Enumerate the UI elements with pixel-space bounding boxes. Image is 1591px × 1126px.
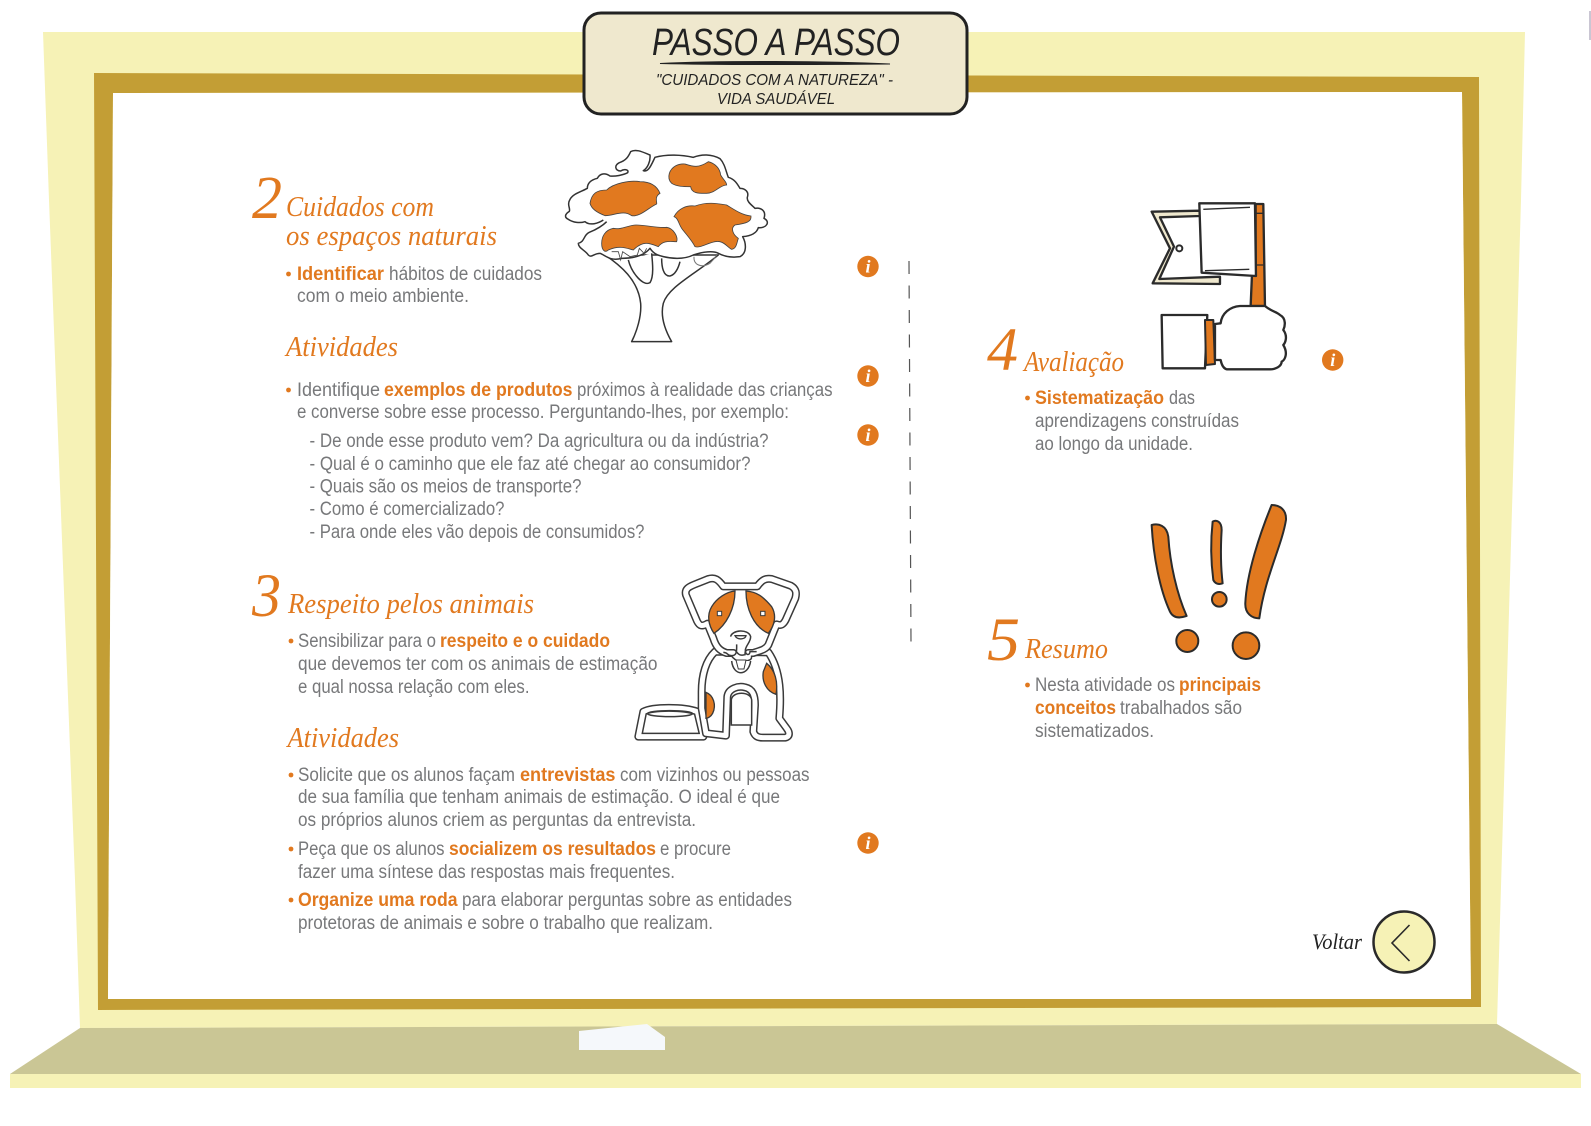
activities list: de sua família que tenham animais de estimação. O ideal é que — [298, 787, 780, 808]
number 5: 5 — [987, 607, 1020, 674]
heading section 2 — [286, 192, 497, 252]
heading section 4: Avaliação — [1022, 347, 1124, 378]
activities list: protetoras de animais e sobre o trabalho que realizam. — [298, 913, 713, 934]
section 5: resumo — [987, 607, 1261, 742]
chalk piece — [579, 1024, 665, 1050]
objective text: respeito e o cuidado — [440, 631, 610, 652]
section 5 text — [1025, 675, 1261, 742]
section 4 text: das — [1169, 388, 1195, 409]
activities list: exemplos de produtos — [384, 380, 572, 401]
number 4: 4 — [987, 317, 1018, 384]
activities list: Solicite que os alunos façam — [298, 765, 515, 786]
label voltar: Voltar — [1312, 929, 1362, 954]
subtitle: VIDA SAUDÁVEL — [717, 89, 835, 108]
activities list: fazer uma síntese das respostas mais frequentes. — [298, 862, 675, 883]
activities list: Organize uma roda — [298, 890, 458, 911]
icon: hand holding flag — [1152, 203, 1286, 369]
section 5 text: principais — [1179, 675, 1261, 696]
section 5 text: conceitos — [1035, 698, 1116, 719]
info icon 1 — [857, 256, 879, 277]
objective text — [286, 264, 542, 307]
objective text: que devemos ter com os animais de estimação — [298, 654, 658, 675]
activities list: com vizinhos ou pessoas — [620, 765, 810, 786]
section 4: avaliação — [987, 317, 1239, 455]
activities list: para elaborar perguntas sobre as entidades — [462, 890, 792, 911]
heading atividades: Atividades — [286, 723, 399, 754]
activities list: Identifique — [297, 380, 380, 401]
activities list — [286, 380, 833, 543]
section 5 text: trabalhados são — [1120, 698, 1242, 719]
heading section 2: os espaços naturais — [286, 221, 497, 252]
heading section 3: Respeito pelos animais — [287, 589, 534, 620]
heading atividades: Atividades — [284, 332, 398, 363]
activities list — [289, 765, 810, 934]
subtitle: "CUIDADOS COM A NATUREZA" - — [656, 72, 893, 89]
objective text: hábitos de cuidados — [389, 264, 542, 285]
icon: tree — [566, 150, 767, 342]
activities list: - Para onde eles vão depois de consumidos? — [310, 522, 644, 543]
section 2: cuidados com os espaços naturais — [252, 165, 832, 543]
activities list: entrevistas — [520, 765, 616, 786]
activities list: e converse sobre esse processo. Perguntando-lhes, por exemplo: — [297, 402, 789, 423]
heading section 2: Cuidados com — [286, 192, 434, 223]
activities list: - De onde esse produto vem? Da agricultura ou da indústria? — [310, 431, 768, 452]
title plaque — [584, 13, 967, 114]
section 4 text — [1025, 388, 1239, 455]
number 3: 3 — [251, 563, 281, 630]
white board surface — [108, 92, 1471, 999]
info icon 1: i — [865, 256, 871, 276]
objective text: Identificar — [297, 264, 385, 285]
activities list: socializem os resultados — [449, 839, 656, 860]
info icon 3 — [857, 424, 879, 446]
activities list: Peça que os alunos — [298, 839, 444, 860]
objective text: com o meio ambiente. — [297, 286, 469, 307]
bowl — [638, 708, 703, 737]
objective text: e qual nossa relação com eles. — [298, 677, 530, 698]
activities list: - Qual é o caminho que ele faz até chegar ao consumidor? — [310, 454, 750, 475]
objective text — [289, 631, 658, 698]
number 2: 2 — [252, 165, 282, 232]
section 3: respeito pelos animais — [251, 563, 809, 934]
subtitle — [656, 72, 893, 108]
info icon 4 — [857, 832, 879, 854]
chalk tray — [10, 1024, 1581, 1088]
activities list: - Como é comercializado? — [310, 499, 504, 520]
activities list: e procure — [660, 839, 731, 860]
gold inner frame — [94, 73, 1481, 1010]
icon: back arrow circle — [1374, 912, 1434, 972]
info icon 2: i — [865, 366, 871, 386]
info icon 4: i — [865, 833, 871, 853]
heading section 5: Resumo — [1024, 634, 1108, 665]
title: passo a passo: PASSO A PASSO — [652, 22, 900, 64]
info icon 3: i — [865, 425, 871, 445]
activities list: próximos à realidade das crianças — [577, 380, 832, 401]
objective text: Sensibilizar para o — [298, 631, 436, 652]
info icon 5: i — [1330, 350, 1335, 370]
section 4 text: ao longo da unidade. — [1035, 434, 1193, 455]
icon: dog with bowl — [638, 578, 796, 738]
info icon 5 — [1322, 349, 1343, 371]
section 4 text: aprendizagens construídas — [1035, 411, 1239, 432]
back button — [1312, 912, 1434, 972]
activities list: os próprios alunos criem as perguntas da entrevista. — [298, 810, 696, 831]
icon: exclamation marks — [1152, 505, 1286, 659]
section 5 text: Nesta atividade os — [1035, 675, 1175, 696]
section 4 text: Sistematização — [1035, 388, 1164, 409]
activities list: - Quais são os meios de transporte? — [310, 476, 582, 498]
section 5 text: sistematizados. — [1035, 721, 1154, 742]
info icon 2 — [857, 365, 879, 387]
